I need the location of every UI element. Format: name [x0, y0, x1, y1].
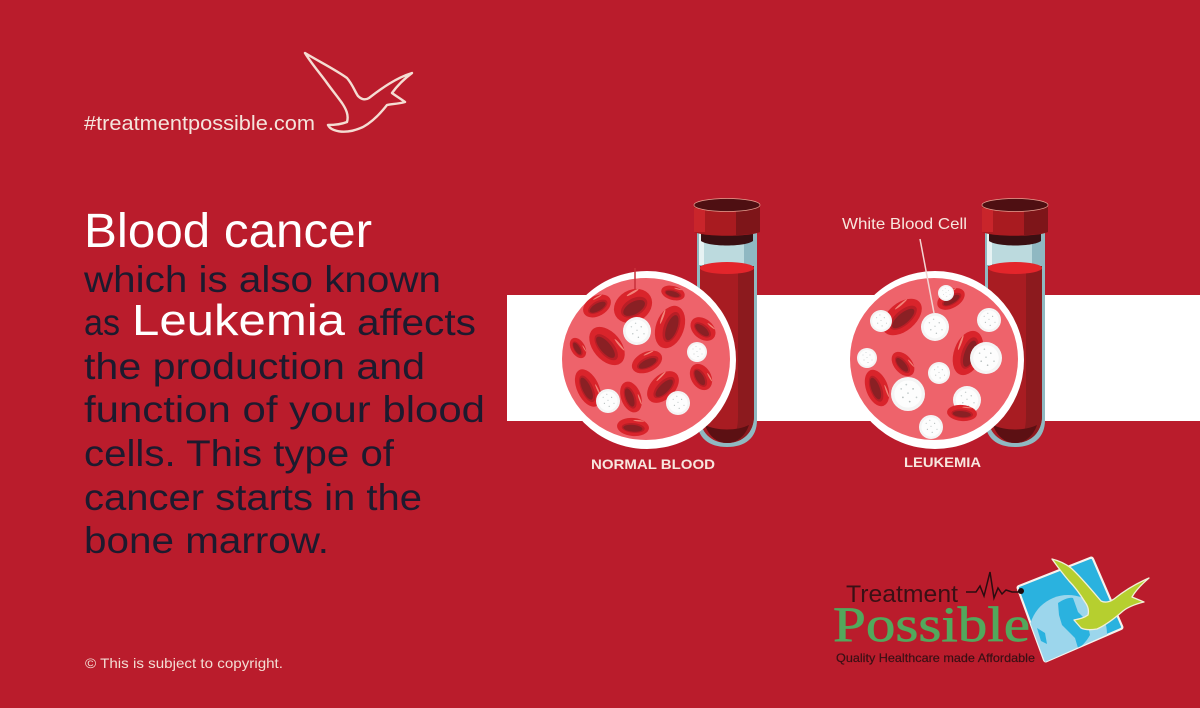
white band: [507, 295, 1200, 421]
white blood cell label: White Blood Cell: [842, 216, 967, 233]
logo word Possible: Possible: [833, 596, 1030, 652]
logo: Treatment Possible: [833, 558, 1149, 673]
logo card with globe: [1018, 558, 1122, 673]
body line 2: affects: [357, 302, 476, 343]
heading: Blood cancer: Blood cancer: [84, 205, 372, 258]
body line 6: cancer starts in the: [84, 477, 422, 518]
logo bird: [1052, 559, 1149, 630]
body line 1: which is also known: [83, 259, 441, 300]
copyright note: © This is subject to copyright.: [85, 655, 283, 671]
normal blood label: NORMAL BLOOD: [591, 456, 715, 472]
arrow: white blood cell pointer: [920, 239, 934, 313]
heading text block: [83, 205, 485, 561]
normal blood circle: [558, 268, 736, 449]
leukemia label: LEUKEMIA: [904, 454, 981, 470]
body line 5: cells. This type of: [84, 433, 395, 474]
icon: test tube normal: [694, 198, 760, 447]
body line 2: Leukemia: [132, 296, 346, 345]
body line 2: [84, 296, 476, 345]
body line 2: as: [84, 302, 120, 343]
website hashtag: #treatmentpossible.com: [84, 113, 315, 135]
body line 7: bone marrow.: [84, 520, 329, 561]
leukemia circle: [846, 271, 1024, 449]
icon: bird outline: [305, 53, 412, 132]
icon: test tube leukemia: [982, 198, 1048, 447]
logo pulse dot: [1018, 588, 1024, 594]
logo pulse line: [966, 572, 1021, 598]
logo word Treatment: Treatment: [846, 581, 958, 608]
logo tagline: Quality Healthcare made Affordable: [836, 651, 1035, 665]
body line 4: function of your blood: [84, 389, 485, 430]
body line 3: the production and: [84, 346, 425, 387]
